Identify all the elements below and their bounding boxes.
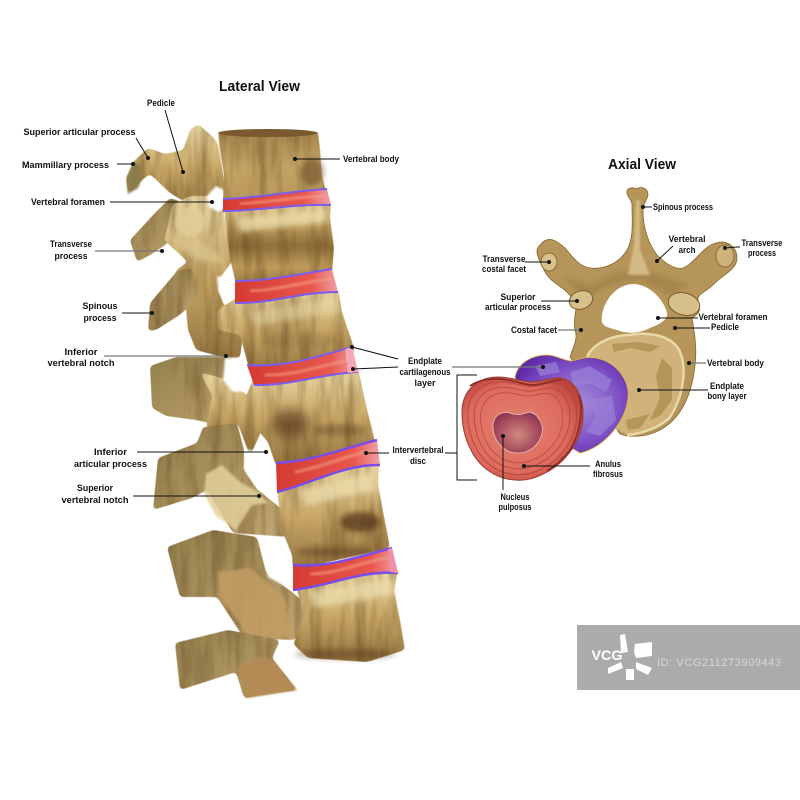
bracket to axial disc <box>445 375 477 480</box>
label: transverse costal facet: Transverse <box>482 254 526 265</box>
label: transverse process lateral: process <box>54 251 88 262</box>
label: inferior vertebral notch <box>48 347 228 369</box>
label: anulus fibrosus: Anulus <box>595 459 621 470</box>
illustration: lateral lumbar spine <box>126 124 405 698</box>
label: vertebral body lateral <box>293 154 400 165</box>
body four <box>240 368 375 466</box>
label: endplate bony layer: Endplate <box>710 381 744 392</box>
label: transverse process axial: Transverse <box>742 238 782 249</box>
foramen three <box>223 358 256 392</box>
title: axial view: Axial View <box>608 156 676 173</box>
mottle right <box>650 358 672 420</box>
endplate rim <box>587 334 684 435</box>
label: transverse process axial <box>723 238 782 259</box>
shade body five bottom <box>295 547 375 557</box>
endplate mottling <box>612 342 672 430</box>
mammillary tip shadow <box>127 162 142 194</box>
mottle top <box>612 342 660 352</box>
label: nucleus pulposus <box>498 434 532 513</box>
body six <box>293 570 405 662</box>
label: spinous process axial: Spinous process <box>653 202 713 213</box>
label: vertebral body lateral: Vertebral body <box>343 154 400 165</box>
inferior articular process five highlight <box>204 465 268 530</box>
anulus fibrosus <box>462 377 583 480</box>
purple mottling <box>535 362 616 436</box>
foramen five <box>260 540 296 592</box>
highlight under disc four <box>300 472 374 506</box>
watermark panel <box>577 625 800 690</box>
nucleus pulposus <box>493 412 542 453</box>
label: vertebral foramen lateral <box>31 197 214 208</box>
label: inferior articular process <box>74 447 268 470</box>
mottle bottom <box>626 414 650 430</box>
watermark id text: ID: VCG211273909443 <box>657 657 781 669</box>
label: vertebral body axial: Vertebral body <box>707 358 765 369</box>
foramen two <box>217 275 236 304</box>
shade body one <box>300 158 324 186</box>
foramen four <box>244 450 280 496</box>
body five <box>277 462 390 570</box>
label: spinous process lateral <box>82 301 154 324</box>
transverse process five <box>153 423 290 537</box>
ring one <box>468 382 577 475</box>
superior articular facet left <box>567 288 595 312</box>
mottle patch two <box>586 396 616 436</box>
anulus rings <box>468 382 577 475</box>
label: transverse process lateral <box>50 239 164 262</box>
label: costal facet: Costal facet <box>511 325 558 336</box>
illustration: axial vertebra and disc <box>462 188 737 480</box>
purple cartilage layer <box>515 355 628 453</box>
posterior elements of the vertebrae <box>126 124 314 698</box>
label: nucleus pulposus: Nucleus <box>500 492 530 503</box>
label: inferior articular process: articular process <box>74 459 147 470</box>
disc one <box>223 189 331 211</box>
label: endplate bony layer <box>637 381 747 402</box>
labels: axial view <box>482 202 782 513</box>
spinous process three <box>148 268 198 331</box>
body two <box>224 200 334 284</box>
lower tip highlight <box>238 656 297 698</box>
articular process six highlight <box>218 568 292 640</box>
label: inferior vertebral notch: vertebral notch <box>48 358 115 369</box>
label: inferior vertebral notch: Inferior <box>64 347 98 358</box>
label: superior articular process <box>24 127 150 160</box>
lamina two <box>164 196 245 358</box>
shade body four <box>272 409 308 439</box>
watermark logo petals <box>608 634 652 680</box>
label: anulus fibrosus <box>522 459 623 480</box>
shade body five <box>340 512 380 532</box>
label: spinous process axial <box>641 202 713 213</box>
dark shading on bodies <box>262 158 395 659</box>
label: spinous process lateral: process <box>84 313 116 324</box>
label: transverse process lateral: Transverse <box>50 239 92 250</box>
transverse facet right <box>716 245 734 267</box>
disc four <box>276 440 380 492</box>
label: superior articular process: Superior articular process <box>24 127 136 138</box>
highlight under disc two <box>250 298 340 326</box>
label: pedicle lateral <box>147 98 185 174</box>
label: spinous process lateral: Spinous <box>82 301 118 312</box>
highlight under disc one <box>236 208 328 232</box>
anulus dark edge <box>470 379 581 471</box>
label: endplate bony layer: bony layer <box>708 391 747 402</box>
disc five <box>293 548 398 590</box>
label: transverse costal facet: costal facet <box>482 264 527 275</box>
label: vertebral foramen axial <box>656 312 768 323</box>
label: mammillary process: Mammillary process <box>22 160 109 171</box>
vertebral bodies <box>218 129 405 662</box>
body one <box>218 130 326 203</box>
label: intervertebral disc: Intervertebral <box>392 445 444 456</box>
intervertebral discs <box>223 189 398 590</box>
disc two <box>235 269 338 303</box>
label: vertebral foramen lateral: Vertebral foramen <box>31 197 105 208</box>
vertebral foramen <box>602 284 667 333</box>
highlight under disc five <box>310 578 396 608</box>
superior articular facet right <box>666 289 702 319</box>
mottle patch one <box>570 366 612 392</box>
label: anulus fibrosus: fibrosus <box>593 469 623 480</box>
shade body three <box>262 332 338 348</box>
arch wing shading <box>560 272 690 298</box>
label: vertebral body axial <box>687 358 765 369</box>
vertebral foramina cut-outs <box>207 186 296 592</box>
body three <box>218 288 355 372</box>
label: superior articular process axial: articular process <box>485 302 551 313</box>
watermark logo text: VCG <box>592 647 623 663</box>
label: nucleus pulposus: pulposus <box>498 502 532 513</box>
label: endplate cartilagenous layer: layer <box>414 378 436 389</box>
label: superior vertebral notch: Superior <box>77 483 113 494</box>
shade body four right <box>314 424 366 436</box>
label: superior vertebral notch <box>62 483 261 506</box>
label: superior vertebral notch: vertebral notch <box>62 495 129 506</box>
title: lateral view: Lateral View <box>219 78 300 95</box>
label: pedicle lateral: Pedicle <box>147 98 175 109</box>
label: vertebral arch: Vertebral <box>668 234 706 245</box>
arch light ridge <box>628 200 650 275</box>
label: vertebral arch <box>655 234 706 263</box>
transverse process two <box>130 198 190 262</box>
lamina and articular process four <box>200 372 262 456</box>
disc three <box>247 347 358 385</box>
label: endplate cartilagenous layer: cartilagenous <box>400 367 450 378</box>
lamina three highlight <box>170 235 226 262</box>
shade body six bottom <box>295 649 395 659</box>
label: transverse process axial: process <box>748 248 776 259</box>
spinous process six <box>167 530 314 640</box>
highlights on bodies <box>236 208 396 608</box>
label: superior articular process axial <box>485 292 579 313</box>
labels: lateral view <box>22 98 545 506</box>
transverse facet left <box>541 253 557 271</box>
ring three <box>481 393 563 463</box>
upper articular knob highlight <box>175 207 205 237</box>
top articular process and pedicle <box>126 124 228 216</box>
spinous process four <box>150 357 238 424</box>
ring two <box>474 387 570 469</box>
vertebral arch and spinous process <box>537 188 737 436</box>
label: pedicle axial: Pedicle <box>711 322 739 333</box>
lower transverse process <box>175 630 297 698</box>
label: superior articular process axial: Superior <box>500 292 536 303</box>
endplate bony layer <box>587 334 684 435</box>
mottle patch three <box>535 362 560 376</box>
label: inferior articular process: Inferior <box>94 447 127 458</box>
body one top cap <box>218 129 318 137</box>
foramen one <box>207 186 226 212</box>
label: transverse costal facet <box>482 254 551 275</box>
label: endplate cartilagenous layer: Endplate <box>408 356 442 367</box>
label: endplate cartilagenous layer <box>350 345 545 389</box>
label: vertebral arch: arch <box>678 245 696 256</box>
label: pedicle axial <box>673 322 739 333</box>
label: vertebral foramen axial: Vertebral foramen <box>698 312 768 323</box>
label: intervertebral disc <box>364 445 444 467</box>
label: intervertebral disc: disc <box>410 456 426 467</box>
